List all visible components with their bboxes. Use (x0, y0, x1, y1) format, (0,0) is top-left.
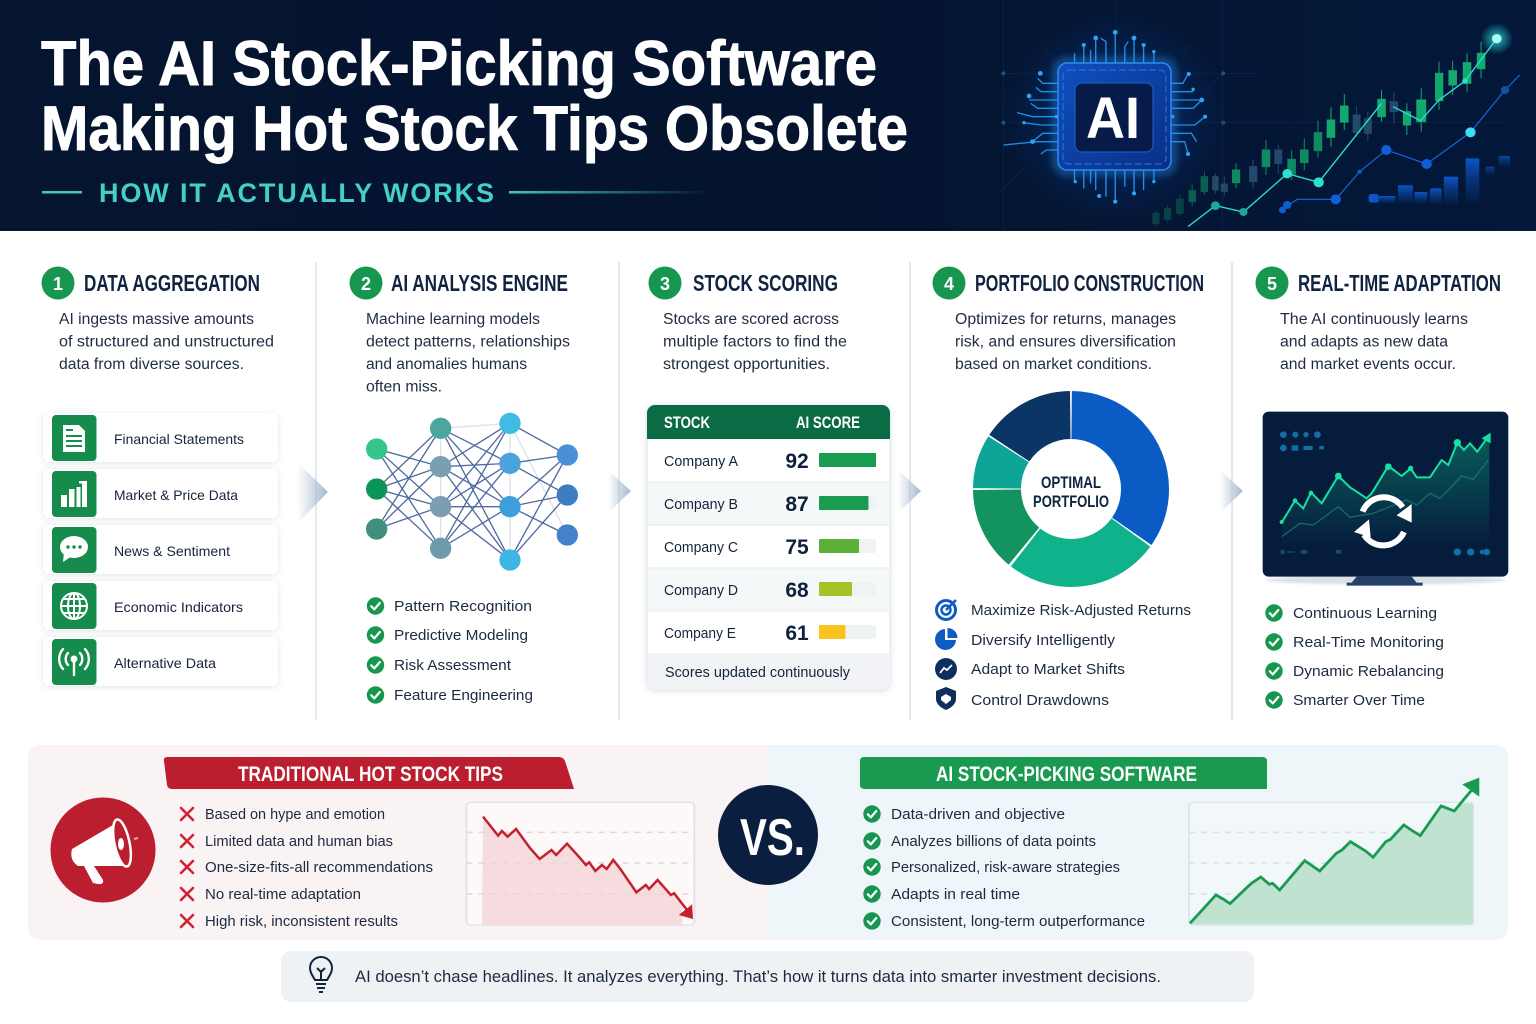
list: drawbacks: One-size-fits-all recommendations (205, 859, 433, 876)
donut centre label: PORTFOLIO (1033, 493, 1109, 511)
VS badge (718, 785, 818, 885)
row: company A: Company A (664, 454, 738, 470)
list: portfolio goals: Diversify Intelligently (971, 632, 1116, 649)
step badge 3: 3 (660, 274, 670, 294)
list: portfolio goals: Control Drawdowns (971, 692, 1109, 709)
data source: economic indicators: Economic Indicators (114, 599, 243, 615)
checklist: analysis capabilities: Predictive Modeling (394, 627, 528, 644)
list: drawbacks (181, 806, 433, 930)
description: risk, and ensures diversification (955, 334, 1176, 350)
list: drawbacks: No real-time adaptation (205, 886, 361, 903)
score table: AI SCORE (796, 413, 860, 432)
step badge 1 (42, 266, 74, 300)
data source: market and price data (43, 469, 278, 518)
row: company D (664, 579, 876, 602)
arrow: step 3 to 4 (898, 470, 921, 513)
title: Making Hot Stock Tips Obsolete (41, 94, 908, 164)
takeaway bar (281, 951, 1254, 1002)
description (955, 311, 1176, 373)
row: company C (664, 536, 876, 559)
score table (647, 405, 890, 690)
data source: alternative data (43, 637, 278, 686)
description: of structured and unstructured (59, 334, 274, 350)
row: company D: Company D (664, 583, 738, 599)
step badge 5: 5 (1267, 274, 1277, 294)
list: benefits (863, 805, 1145, 930)
description: often miss. (366, 378, 442, 396)
description: and adapts as new data (1280, 334, 1448, 350)
heading: data aggregation: DATA AGGREGATION (84, 270, 260, 296)
data source: news and sentiment: News & Sentiment (114, 543, 230, 559)
list: portfolio goals: Maximize Risk-Adjusted Returns (971, 602, 1191, 619)
title: The AI Stock-Picking Software (41, 29, 877, 99)
panel: traditional hot stock tips (28, 745, 768, 940)
icon: target (936, 600, 956, 620)
banner: traditional: TRADITIONAL HOT STOCK TIPS (238, 763, 503, 786)
panel: AI stock-picking software (768, 745, 1508, 940)
description: Machine learning models (366, 311, 540, 328)
row: company E: Company E (664, 626, 736, 642)
checklist: analysis capabilities: Pattern Recognition (394, 598, 532, 615)
step badge 4 (932, 266, 966, 300)
table footer: Scores updated continuously (665, 665, 851, 681)
description (59, 311, 274, 373)
banner: AI software (860, 757, 1267, 789)
description (366, 311, 570, 396)
step badge 5 (1256, 266, 1288, 300)
row: company E: 61 (785, 622, 809, 645)
description: detect patterns, relationships (366, 334, 570, 350)
list: drawbacks: High risk, inconsistent results (205, 913, 398, 930)
neural network diagram (366, 413, 578, 571)
row: company C: 75 (785, 536, 809, 559)
row: company B: 87 (785, 493, 809, 516)
icon: shield (936, 687, 956, 710)
chip label: AI (1086, 86, 1140, 151)
row: company C: Company C (664, 540, 738, 556)
row: company B (664, 493, 876, 516)
description (663, 311, 847, 373)
icon: refresh (1354, 497, 1412, 545)
step badge 2 (350, 266, 382, 300)
description: AI ingests massive amounts (59, 311, 254, 328)
row: company E (664, 622, 876, 645)
checklist: adaptation features (1265, 604, 1444, 709)
data source: alternative data: Alternative Data (114, 655, 216, 671)
heading: AI analysis engine: AI ANALYSIS ENGINE (391, 270, 568, 296)
title (41, 29, 908, 164)
column 5: real-time adaptation (1256, 266, 1508, 709)
icon: trend (935, 658, 957, 680)
header banner (0, 0, 1536, 231)
donut centre label (1033, 474, 1109, 511)
checklist: analysis capabilities: Risk Assessment (394, 657, 512, 674)
column 2: AI analysis engine (350, 266, 578, 704)
list: drawbacks: Limited data and human bias (205, 833, 393, 850)
column 1: data aggregation (42, 266, 278, 686)
description: Stocks are scored across (663, 311, 839, 328)
arrow: step 4 to 5 (1220, 470, 1243, 513)
description: multiple factors to find the (663, 334, 847, 350)
AI chip illustration (999, 0, 1506, 230)
monitor illustration (1263, 412, 1508, 586)
column 3: stock scoring (647, 266, 890, 690)
step badge 2: 2 (361, 274, 371, 294)
column 4: portfolio construction (932, 266, 1204, 710)
donut chart (967, 385, 1175, 593)
stock chart illustration (1153, 23, 1520, 227)
data source: market and price data: Market & Price Data (114, 487, 238, 503)
list: benefits: Consistent, long-term outperformance (891, 913, 1145, 930)
column dividers (316, 262, 1232, 720)
list: portfolio goals: Adapt to Market Shifts (971, 661, 1125, 678)
description: strongest opportunities. (663, 356, 830, 373)
list: drawbacks: Based on hype and emotion (205, 806, 385, 823)
checklist: adaptation features: Continuous Learning (1293, 605, 1437, 622)
description: data from diverse sources. (59, 356, 244, 373)
icon: pie (935, 628, 958, 650)
row: company A: 92 (785, 450, 809, 473)
description (1280, 311, 1468, 373)
description: based on market conditions. (955, 356, 1152, 373)
VS badge: VS. (740, 809, 805, 867)
score table: STOCK (664, 413, 711, 432)
heading: portfolio construction: PORTFOLIO CONSTRUCTION (975, 270, 1204, 296)
description: and anomalies humans (366, 356, 527, 373)
row: company D: 68 (785, 579, 809, 602)
checklist: analysis capabilities (367, 597, 533, 704)
checklist: adaptation features: Real-Time Monitoring (1293, 634, 1444, 651)
chart: rising line (1189, 778, 1479, 925)
icon: light bulb (310, 957, 332, 992)
list: portfolio goals (935, 600, 1191, 710)
row: company B: Company B (664, 497, 738, 513)
description: Optimizes for returns, manages (955, 311, 1176, 328)
list: benefits: Adapts in real time (891, 886, 1020, 903)
data source: economic indicators (43, 581, 278, 630)
banner: traditional (164, 757, 574, 789)
checklist: adaptation features: Dynamic Rebalancing (1293, 663, 1444, 680)
checklist: analysis capabilities: Feature Engineering (394, 687, 533, 704)
arrow: step 2 to 3 (608, 470, 631, 513)
data source: financial statements: Financial Statements (114, 431, 244, 447)
heading: stock scoring: STOCK SCORING (693, 270, 838, 296)
description: The AI continuously learns (1280, 311, 1468, 328)
takeaway text: AI doesn’t chase headlines. It analyzes everything. That’s how it turns data into smarter investment decisions. (355, 968, 1161, 986)
icon: megaphone (50, 798, 156, 902)
subtitle: HOW IT ACTUALLY WORKS (99, 178, 494, 208)
data source: financial statements (43, 413, 278, 462)
step badge 3 (648, 266, 682, 300)
row: company A (664, 450, 876, 473)
data source: news and sentiment (43, 525, 278, 574)
description: and market events occur. (1280, 356, 1456, 373)
chart: falling line (467, 802, 694, 925)
donut centre label: OPTIMAL (1041, 474, 1101, 492)
list: benefits: Data-driven and objective (891, 806, 1065, 823)
list: benefits: Personalized, risk-aware strategies (891, 859, 1120, 876)
step badge 1: 1 (53, 274, 63, 294)
banner: AI software: AI STOCK-PICKING SOFTWARE (936, 763, 1197, 786)
arrow: step 1 to 2 (297, 462, 328, 524)
step badge 4: 4 (944, 274, 954, 294)
checklist: adaptation features: Smarter Over Time (1293, 692, 1425, 709)
list: benefits: Analyzes billions of data points (891, 833, 1096, 850)
